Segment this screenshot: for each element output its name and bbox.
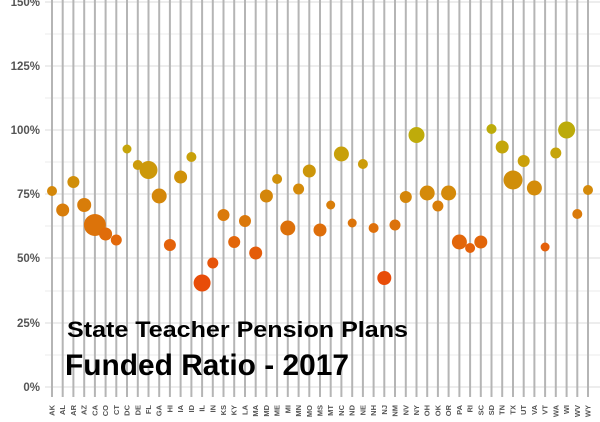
x-axis state labels: ID (187, 404, 196, 412)
x-axis state labels: AZ (80, 405, 89, 415)
x-axis state labels: CT (112, 405, 121, 415)
x-axis state labels: IL (198, 405, 207, 412)
x-axis state labels: PA (455, 404, 464, 415)
x-axis state labels: MD (262, 404, 271, 417)
x-axis state labels: WY (584, 405, 592, 417)
x-axis state labels: KY (230, 405, 239, 415)
x-axis state labels: NH (369, 405, 378, 416)
x-axis state labels: NE (358, 405, 367, 415)
x-axis state labels: MI (283, 405, 292, 413)
x-axis state labels: NC (337, 404, 346, 416)
x-axis state labels: CO (101, 405, 110, 416)
x-axis state labels (48, 404, 592, 417)
x-axis state labels: NY (412, 405, 421, 415)
title (65, 317, 408, 382)
x-axis state labels: HI (165, 405, 174, 412)
x-axis state labels: AR (69, 404, 78, 416)
x-axis state labels: NM (390, 405, 400, 417)
x-axis state labels: VT (541, 405, 550, 415)
x-axis state labels: VA (530, 404, 539, 415)
x-axis state labels: TN (498, 405, 507, 415)
x-axis state labels: SD (487, 404, 496, 415)
x-axis state labels: WI (562, 405, 571, 414)
title: State Teacher Pension Plans (67, 317, 408, 342)
x-axis state labels: WA (551, 404, 560, 417)
title: Funded Ratio - 2017 (65, 349, 349, 382)
x-axis state labels: TX (508, 405, 518, 415)
x-axis state labels: IA (176, 404, 185, 412)
x-axis state labels: OK (433, 404, 442, 416)
x-axis state labels: ND (348, 404, 357, 416)
x-axis state labels: SC (476, 404, 485, 415)
x-axis state labels: OH (423, 405, 432, 416)
x-axis state labels: MN (294, 405, 303, 417)
x-axis state labels: GA (155, 404, 164, 416)
y-axis labels: 0% (23, 382, 40, 394)
y-axis labels: 25% (17, 318, 40, 330)
data points (47, 122, 593, 292)
x-axis state labels: DC (122, 404, 132, 416)
x-axis state labels: KS (219, 405, 228, 415)
x-axis state labels: ME (273, 405, 282, 416)
x-axis state labels: IN (208, 405, 217, 412)
x-axis state labels: AL (58, 405, 67, 415)
x-axis state labels: MS (316, 405, 324, 416)
x-axis state labels: CA (90, 404, 99, 416)
x-axis state labels: AK (48, 404, 56, 416)
y-axis labels: 100% (11, 125, 40, 137)
x-axis state labels: MO (305, 405, 314, 417)
x-axis state labels: FL (144, 405, 153, 414)
x-axis state labels: DE (133, 405, 142, 415)
x-axis state labels: OR (444, 404, 453, 416)
x-axis state labels: LA (240, 404, 250, 415)
x-axis state labels: WV (573, 405, 582, 417)
x-axis state labels: MT (326, 405, 335, 416)
x-axis state labels: MA (251, 404, 260, 417)
y-axis labels: 125% (11, 61, 40, 73)
y-axis labels: 50% (17, 253, 40, 265)
y-axis labels (11, 0, 40, 394)
x-axis state labels: NV (401, 405, 410, 415)
x-axis state labels: RI (466, 405, 475, 412)
x-axis state labels: NJ (380, 405, 389, 415)
x-axis state labels: UT (519, 405, 528, 415)
y-axis labels: 75% (17, 189, 40, 201)
